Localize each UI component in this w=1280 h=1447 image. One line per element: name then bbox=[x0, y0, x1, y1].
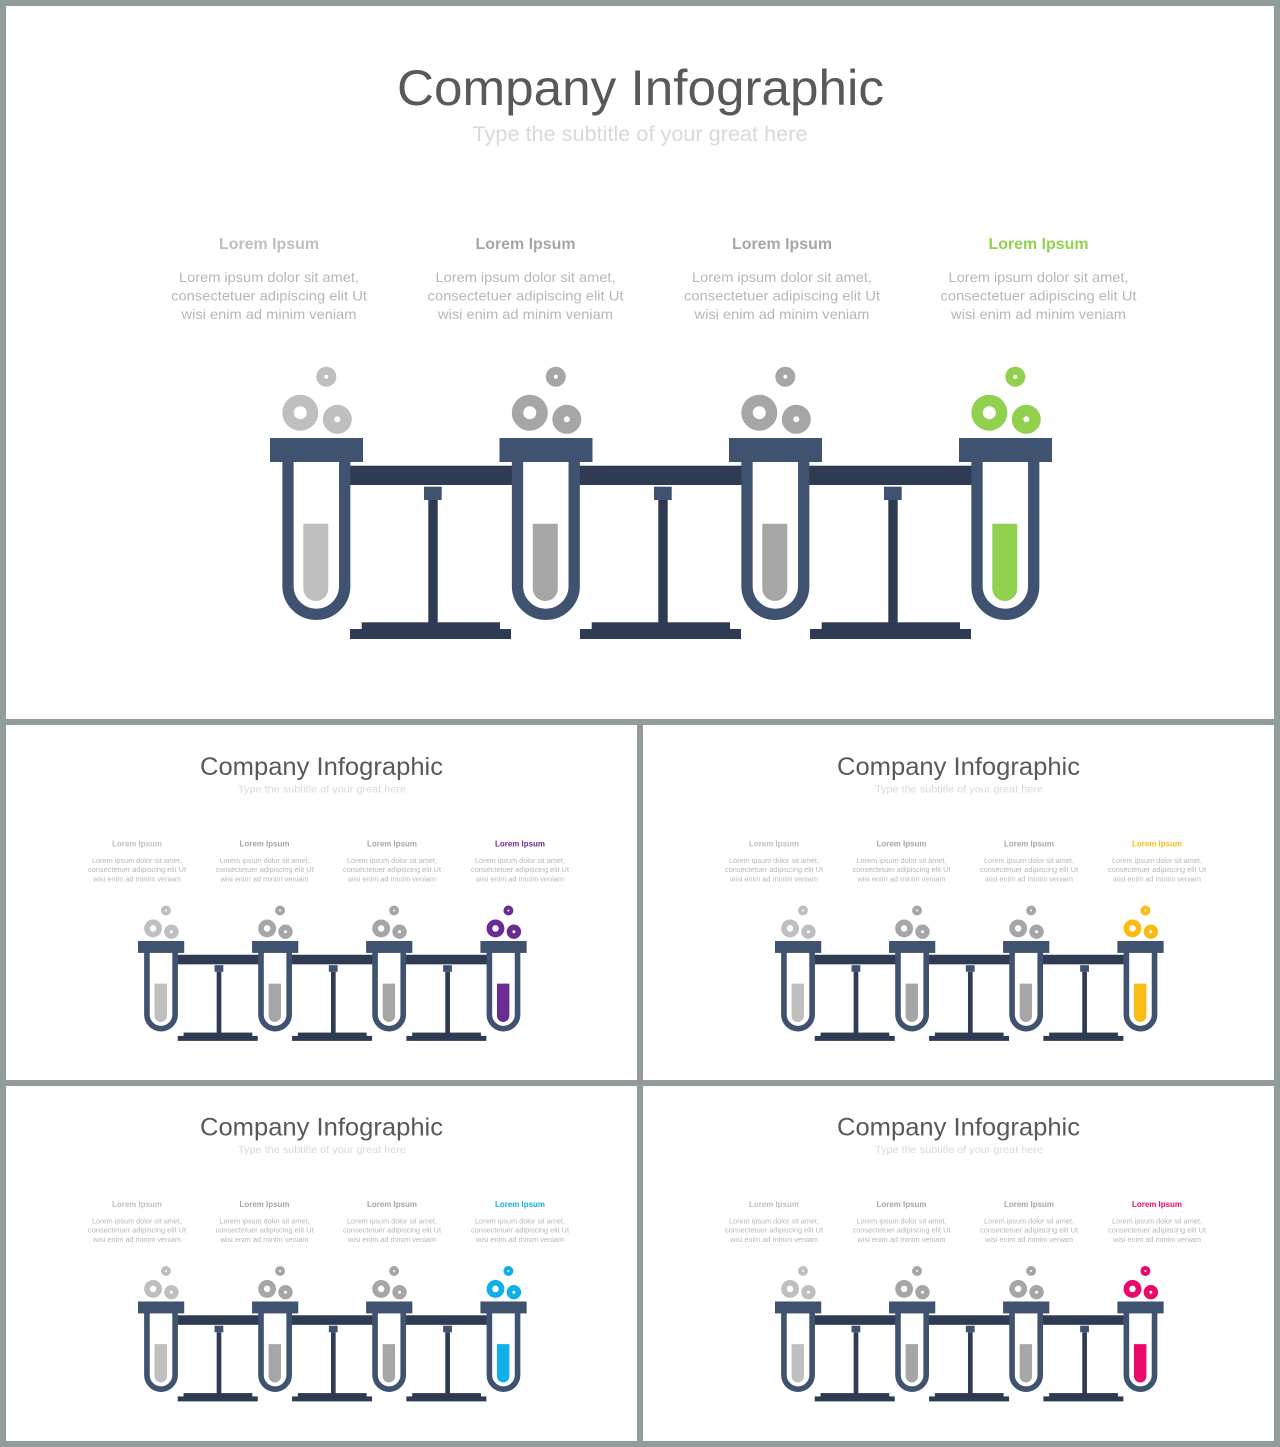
text blocks bbox=[88, 1200, 569, 1244]
text blocks: Lorem Ipsum bbox=[876, 1200, 926, 1209]
icon: test tube 4 green bbox=[959, 367, 1052, 614]
text block 4: Lorem Ipsum bbox=[988, 236, 1088, 253]
text blocks: wisi enim ad minim veniam bbox=[1112, 1237, 1201, 1244]
icon: test tube 2 bbox=[500, 367, 592, 614]
title: Company Infographic bbox=[397, 60, 884, 116]
title: Company Infographic bbox=[837, 753, 1080, 781]
text blocks: Lorem ipsum dolor sit amet, bbox=[92, 858, 182, 865]
text blocks: consectetuer adipiscing elit Ut bbox=[980, 1228, 1078, 1234]
text blocks: consectetuer adipiscing elit Ut bbox=[88, 1228, 186, 1234]
text blocks: consectetuer adipiscing elit Ut bbox=[725, 1228, 823, 1234]
text block 4: Lorem ipsum dolor sit amet, bbox=[948, 269, 1128, 285]
panel: main green slide bbox=[6, 6, 1274, 719]
text block 2: Lorem ipsum dolor sit amet, bbox=[436, 269, 616, 285]
text blocks: wisi enim ad minim veniam bbox=[984, 876, 1073, 884]
text block 1: consectetuer adipiscing elit Ut bbox=[171, 288, 367, 304]
text blocks: wisi enim ad minim veniam bbox=[347, 1237, 436, 1244]
text blocks: wisi enim ad minim veniam bbox=[1112, 876, 1201, 884]
text block 2 bbox=[428, 236, 624, 322]
text blocks: consectetuer adipiscing elit Ut bbox=[216, 867, 314, 874]
text block 2: Lorem Ipsum bbox=[476, 236, 576, 253]
title: Company Infographic bbox=[200, 1114, 443, 1142]
text blocks bbox=[725, 840, 1206, 884]
text block 4 bbox=[940, 236, 1137, 322]
text blocks: wisi enim ad minim veniam bbox=[347, 876, 436, 884]
text blocks: consectetuer adipiscing elit Ut bbox=[725, 867, 823, 874]
text blocks: wisi enim ad minim veniam bbox=[856, 876, 946, 884]
panel: purple slide bbox=[6, 725, 637, 1080]
text block 1: Lorem Ipsum bbox=[219, 236, 319, 253]
panel: yellow slide bbox=[643, 725, 1274, 1080]
text blocks: Lorem Ipsum bbox=[240, 1200, 290, 1209]
text blocks: wisi enim ad minim veniam bbox=[92, 876, 181, 884]
text blocks: Lorem Ipsum bbox=[749, 1200, 799, 1209]
text blocks: Lorem Ipsum bbox=[367, 840, 417, 848]
text blocks: consectetuer adipiscing elit Ut bbox=[343, 1228, 441, 1234]
test tube rack illustration bbox=[270, 367, 1052, 639]
text blocks: wisi enim ad minim veniam bbox=[219, 876, 309, 884]
text blocks: Lorem Ipsum bbox=[367, 1200, 417, 1209]
text blocks: consectetuer adipiscing elit Ut bbox=[1108, 867, 1206, 874]
text blocks: wisi enim ad minim veniam bbox=[475, 1237, 564, 1244]
icon: test tube 1 bbox=[270, 367, 363, 614]
text blocks: Lorem Ipsum bbox=[1132, 1200, 1182, 1209]
subtitle: Type the subtitle of your great here bbox=[875, 784, 1043, 796]
text blocks: wisi enim ad minim veniam bbox=[984, 1237, 1073, 1244]
text blocks: consectetuer adipiscing elit Ut bbox=[471, 867, 569, 874]
text block 1: wisi enim ad minim veniam bbox=[180, 306, 356, 322]
text blocks: Lorem Ipsum bbox=[1004, 840, 1054, 848]
text blocks bbox=[725, 1200, 1206, 1244]
text block 3: Lorem Ipsum bbox=[732, 236, 832, 253]
text blocks: Lorem Ipsum bbox=[240, 840, 290, 848]
text blocks: Lorem Ipsum bbox=[876, 840, 926, 848]
test tube rack illustration bbox=[775, 906, 1164, 1041]
title: Company Infographic bbox=[200, 753, 443, 781]
text block 3: Lorem ipsum dolor sit amet, bbox=[692, 269, 872, 285]
text block 3 bbox=[684, 236, 880, 322]
subtitle: Type the subtitle of your great here bbox=[472, 123, 808, 146]
title: Company Infographic bbox=[837, 1114, 1080, 1142]
text blocks: Lorem ipsum dolor sit amet, bbox=[220, 1218, 310, 1226]
text blocks: Lorem ipsum dolor sit amet, bbox=[984, 1218, 1074, 1226]
panel: blue slide bbox=[6, 1086, 637, 1441]
text block 3: consectetuer adipiscing elit Ut bbox=[684, 288, 880, 304]
text block 3: wisi enim ad minim veniam bbox=[693, 306, 870, 322]
text blocks: Lorem Ipsum bbox=[112, 840, 162, 848]
text blocks: consectetuer adipiscing elit Ut bbox=[343, 867, 441, 874]
text blocks: Lorem ipsum dolor sit amet, bbox=[729, 1218, 819, 1226]
text blocks bbox=[88, 840, 569, 884]
text block 4: wisi enim ad minim veniam bbox=[950, 306, 1126, 322]
text blocks: wisi enim ad minim veniam bbox=[475, 876, 564, 884]
text blocks: Lorem Ipsum bbox=[495, 1200, 545, 1209]
text blocks: consectetuer adipiscing elit Ut bbox=[852, 867, 951, 874]
text blocks: consectetuer adipiscing elit Ut bbox=[471, 1228, 569, 1234]
subtitle: Type the subtitle of your great here bbox=[238, 784, 406, 796]
text blocks: Lorem ipsum dolor sit amet, bbox=[220, 858, 310, 865]
text blocks: consectetuer adipiscing elit Ut bbox=[216, 1228, 314, 1234]
text blocks: Lorem ipsum dolor sit amet, bbox=[475, 1218, 565, 1226]
text blocks: consectetuer adipiscing elit Ut bbox=[1108, 1228, 1206, 1234]
text blocks: wisi enim ad minim veniam bbox=[729, 1237, 818, 1244]
text block 4: consectetuer adipiscing elit Ut bbox=[940, 288, 1137, 304]
text blocks: Lorem ipsum dolor sit amet, bbox=[1112, 1218, 1202, 1226]
text blocks: consectetuer adipiscing elit Ut bbox=[980, 867, 1078, 874]
text block 1 bbox=[171, 236, 367, 322]
icon: test tube 3 bbox=[729, 367, 822, 614]
test tube rack illustration bbox=[138, 906, 527, 1041]
text blocks: wisi enim ad minim veniam bbox=[856, 1237, 946, 1244]
text blocks: consectetuer adipiscing elit Ut bbox=[852, 1228, 951, 1234]
subtitle: Type the subtitle of your great here bbox=[875, 1144, 1043, 1156]
test tube rack illustration bbox=[138, 1266, 527, 1401]
text blocks: Lorem ipsum dolor sit amet, bbox=[475, 858, 565, 865]
text blocks: Lorem ipsum dolor sit amet, bbox=[92, 1218, 182, 1226]
panel: pink slide bbox=[643, 1086, 1274, 1441]
text blocks: wisi enim ad minim veniam bbox=[219, 1237, 309, 1244]
text blocks: wisi enim ad minim veniam bbox=[729, 876, 818, 884]
text blocks: Lorem ipsum dolor sit amet, bbox=[856, 858, 947, 865]
text blocks: consectetuer adipiscing elit Ut bbox=[88, 867, 186, 874]
text blocks: Lorem ipsum dolor sit amet, bbox=[984, 858, 1074, 865]
text blocks: Lorem ipsum dolor sit amet, bbox=[347, 858, 437, 865]
text blocks: Lorem Ipsum bbox=[495, 840, 545, 848]
text block 1: Lorem ipsum dolor sit amet, bbox=[179, 269, 359, 285]
text blocks: Lorem Ipsum bbox=[1132, 840, 1182, 848]
text blocks: Lorem Ipsum bbox=[112, 1200, 162, 1209]
text block 2: consectetuer adipiscing elit Ut bbox=[428, 288, 624, 304]
text blocks: Lorem ipsum dolor sit amet, bbox=[856, 1218, 947, 1226]
text blocks: Lorem ipsum dolor sit amet, bbox=[347, 1218, 437, 1226]
text blocks: Lorem Ipsum bbox=[749, 840, 799, 848]
text blocks: Lorem ipsum dolor sit amet, bbox=[1112, 858, 1202, 865]
test tube rack illustration bbox=[775, 1266, 1164, 1401]
text blocks: Lorem ipsum dolor sit amet, bbox=[729, 858, 819, 865]
subtitle: Type the subtitle of your great here bbox=[238, 1144, 406, 1156]
text block 2: wisi enim ad minim veniam bbox=[437, 306, 613, 322]
text blocks: wisi enim ad minim veniam bbox=[92, 1237, 181, 1244]
text blocks: Lorem Ipsum bbox=[1004, 1200, 1054, 1209]
